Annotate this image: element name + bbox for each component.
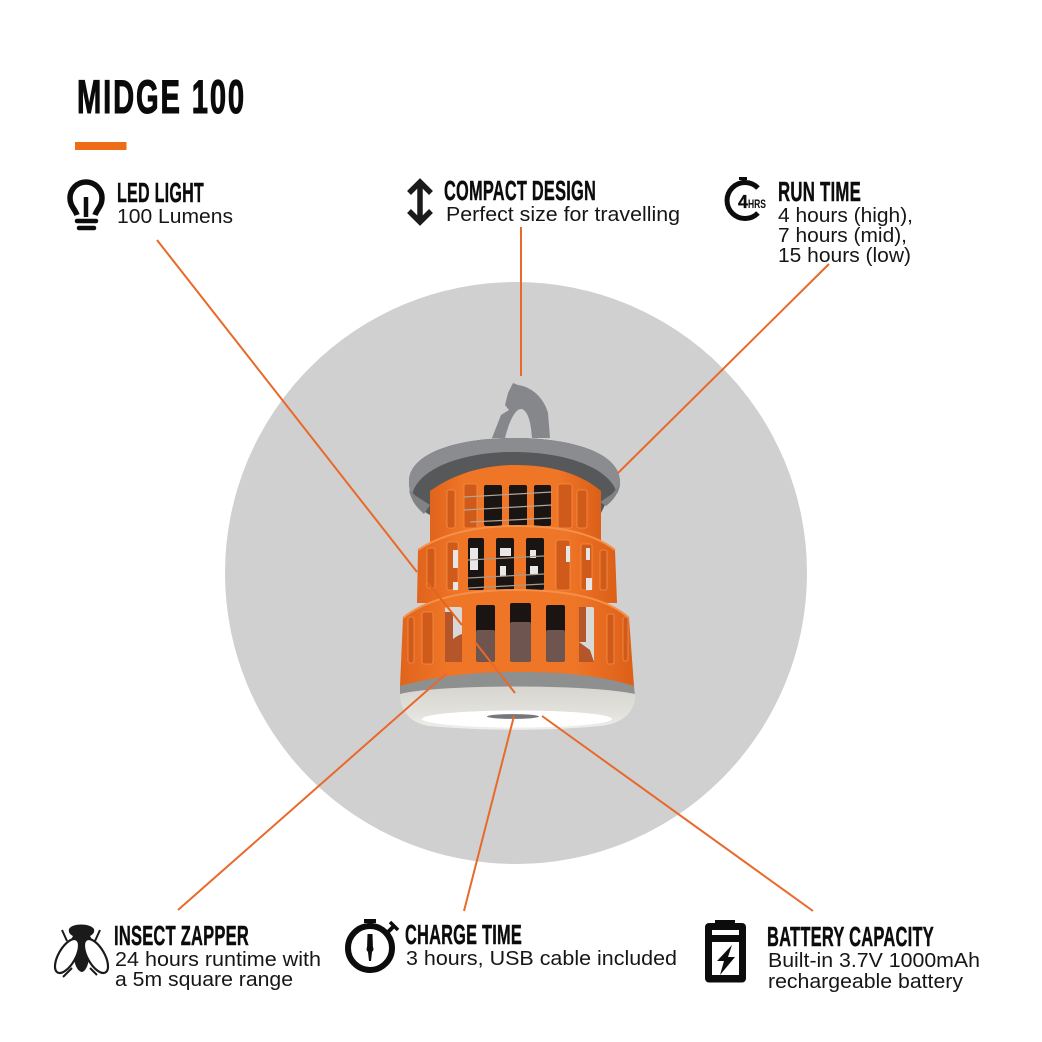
run time text: 15 hours (low) [778,244,911,267]
charge time text: 3 hours, USB cable included [406,947,677,970]
run time text [778,204,913,267]
insect zapper text: a 5m square range [115,968,293,991]
callout line: charge time [464,716,514,911]
icon: 4 hour timer: 4 [738,192,748,212]
compact design heading: COMPACT DESIGN [444,175,596,206]
lantern handle [492,383,550,438]
icon: 4 hour timer [727,177,766,218]
LED light text: 100 Lumens [117,205,233,228]
icon: stopwatch [348,919,398,970]
lantern cage: middle tier [417,526,617,603]
icon: 4 hour timer: HRS [748,197,766,211]
background circle [225,282,807,864]
title accent bar [75,142,126,150]
callout line: LED light [157,240,515,693]
battery capacity heading: BATTERY CAPACITY [767,921,934,952]
run time heading: RUN TIME [778,176,861,207]
battery capacity text: Built-in 3.7V 1000mAh [768,949,980,972]
callout line: insect zapper [178,673,447,910]
compact design text: Perfect size for travelling [446,203,680,226]
product: lantern [400,383,635,730]
battery capacity text: rechargeable battery [768,970,964,993]
insect zapper heading: INSECT ZAPPER [114,920,249,951]
insect zapper text [115,948,321,991]
icon: up-down arrow [409,182,431,222]
charge time heading: CHARGE TIME [405,919,522,950]
lantern light base [400,686,635,730]
lantern cage: top tier [430,465,601,545]
lantern grey band [400,672,635,696]
insect zapper text: 24 hours runtime with [115,948,321,971]
callout line: compact design [520,227,522,376]
run time text: 7 hours (mid), [778,224,907,247]
lantern cage: bottom tier [400,590,634,686]
icon: battery [705,920,746,982]
run time text: 4 hours (high), [778,204,913,227]
battery capacity text [768,949,980,993]
LED light heading: LED LIGHT [117,177,204,208]
icon: fly [50,924,113,977]
callout line: run time [618,264,829,473]
title: MIDGE 100 [77,70,246,123]
callout line: battery capacity [542,716,813,911]
lantern top plate [409,438,620,515]
icon: light bulb [70,182,102,228]
